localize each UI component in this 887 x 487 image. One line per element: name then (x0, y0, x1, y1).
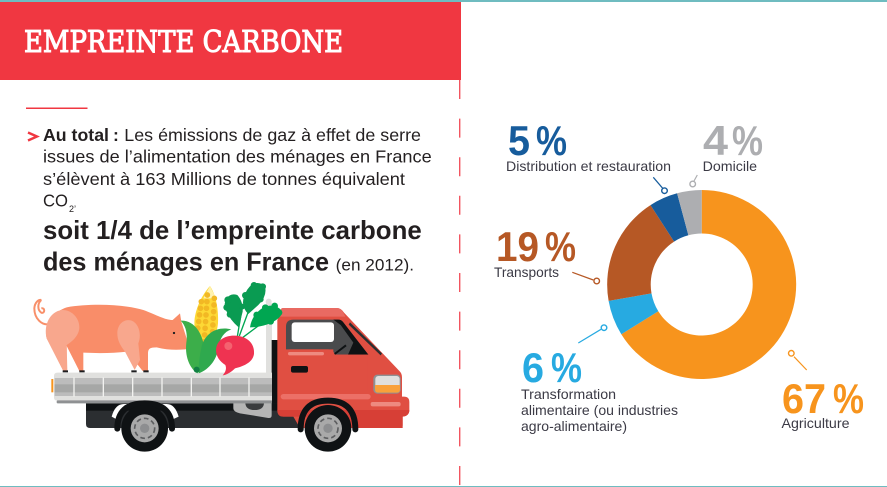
callout: domicile 4%: Domicile (703, 158, 757, 174)
icon: corn (181, 286, 231, 373)
truck bed (51, 373, 272, 403)
callout: transformation 6%: alimentaire (ou industries (521, 402, 678, 418)
icon: pig (34, 300, 189, 372)
text block: total emissions: CO (43, 191, 68, 211)
headlight (373, 375, 401, 394)
text block: total emissions: des ménages en France (43, 247, 329, 277)
text block: total emissions: soit 1/4 de l’empreinte carbone (43, 215, 422, 245)
callout: transformation 6%: Transformation (521, 386, 616, 402)
callout: agriculture 67%: Agriculture (782, 415, 850, 431)
cab (277, 308, 409, 428)
callout: transformation 6%: % (551, 344, 582, 391)
text block: total emissions: Les émissions de gaz à effet de serre (124, 125, 421, 145)
callout: transports 19% (494, 223, 600, 284)
callout: transports 19%: 19 (496, 223, 539, 270)
text block: total emissions: Au total (43, 125, 109, 145)
title banner (0, 2, 461, 80)
title: EMPREINTE CARBONE (24, 25, 343, 60)
slice: transformation 6% (609, 293, 658, 334)
slice: agriculture 67% (621, 190, 796, 379)
callout: transformation 6%: 6 (522, 344, 544, 391)
callout: distribution 5%: % (536, 117, 567, 164)
callout: domicile 4%: % (732, 117, 763, 164)
callout: domicile 4%: 4 (703, 117, 729, 164)
callout: agriculture 67%: % (833, 375, 864, 422)
icon: radish (216, 282, 282, 375)
chassis (86, 403, 300, 428)
callout: distribution 5% (506, 117, 671, 194)
text block: total emissions: s’élèvent à 163 Millions de tonnes équivalent (43, 169, 405, 189)
rear wheel (112, 403, 179, 452)
callout: domicile 4% (690, 117, 763, 187)
illustration: truck carrying pig, corn and radish (34, 282, 409, 452)
slice: transports 19% (607, 205, 674, 301)
callout: transports 19%: % (545, 223, 576, 270)
text block: total emissions: 2’ (69, 204, 76, 214)
callout: agriculture 67%: 67 (782, 375, 826, 422)
callout: distribution 5%: 5 (508, 117, 530, 164)
truck rear upright (266, 303, 272, 373)
text block: total emissions (28, 125, 432, 277)
callout: transformation 6% (521, 325, 678, 434)
callout: agriculture 67% (782, 350, 864, 431)
text block: total emissions: issues de l’alimentation des ménages en France (43, 147, 432, 167)
callout: distribution 5%: Distribution et restauration (506, 158, 671, 174)
donut chart (607, 190, 796, 379)
callout: transports 19%: Transports (494, 264, 559, 280)
text block: total emissions: : (113, 125, 119, 145)
callout: transformation 6%: agro-alimentaire) (521, 418, 627, 434)
text block: total emissions: (en 2012). (336, 256, 414, 275)
slice: distribution 5% (650, 193, 688, 242)
front wheel (301, 401, 355, 452)
slice: domicile 4% (677, 190, 702, 235)
